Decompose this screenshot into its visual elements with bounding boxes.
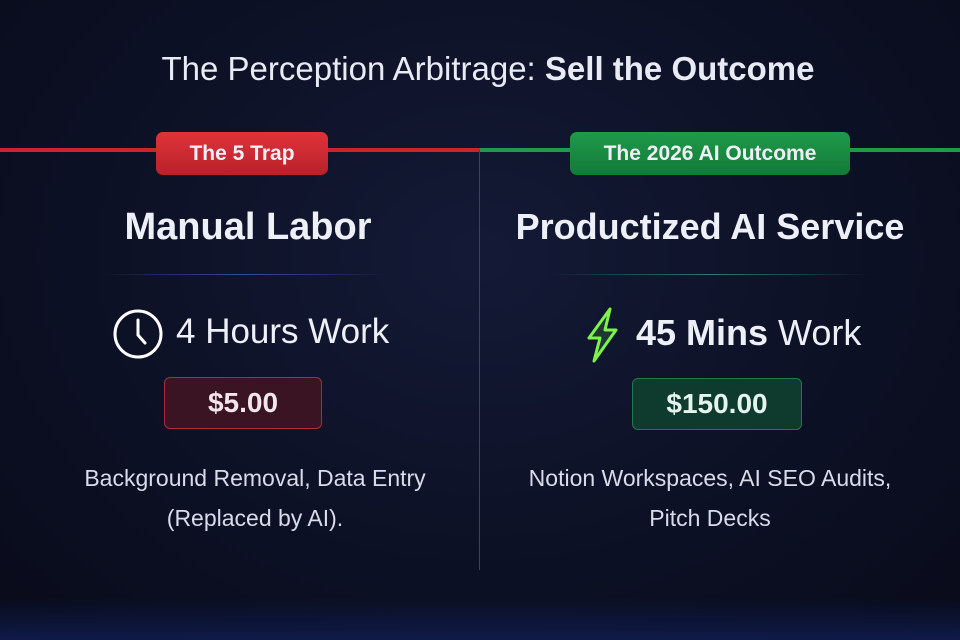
badge: 2026 AI outcome xyxy=(570,132,850,175)
badge: 2026 AI outcome: The 2026 AI Outcome xyxy=(604,142,816,165)
badge: the 5 trap: The 5 Trap xyxy=(189,142,295,165)
price: $150.00: $150.00 xyxy=(666,388,768,419)
badge: the 5 trap xyxy=(156,132,328,175)
time row with bolt icon xyxy=(587,308,862,362)
red top line xyxy=(0,148,480,152)
divider vertical xyxy=(479,150,480,570)
time row with bolt icon: 45 Mins Work xyxy=(636,312,861,353)
title: The Perception Arbitrage: Sell the Outcome xyxy=(162,50,814,87)
icon: lightning bolt xyxy=(587,308,618,362)
panel: manual labor xyxy=(84,132,426,531)
description: manual tasks: (Replaced by AI). xyxy=(167,505,343,531)
description: AI services: Notion Workspaces, AI SEO Audits, xyxy=(529,465,891,491)
panel: productized AI xyxy=(516,132,904,531)
description: manual tasks: Background Removal, Data Entry xyxy=(84,465,426,491)
price: $5.00: $5.00 xyxy=(208,387,278,418)
price: $150.00 xyxy=(632,378,802,430)
description: manual tasks xyxy=(84,465,426,531)
time row with clock icon xyxy=(114,310,390,358)
green top line xyxy=(480,148,960,152)
description: AI services: Pitch Decks xyxy=(649,505,771,531)
description: AI services xyxy=(529,465,891,531)
heading: manual labor: Manual Labor xyxy=(124,206,372,248)
heading: productized AI service: Productized AI Service xyxy=(516,206,904,247)
icon: clock xyxy=(114,310,162,358)
price: $5.00 xyxy=(164,377,322,429)
time row with clock icon: 4 Hours Work xyxy=(176,312,389,351)
